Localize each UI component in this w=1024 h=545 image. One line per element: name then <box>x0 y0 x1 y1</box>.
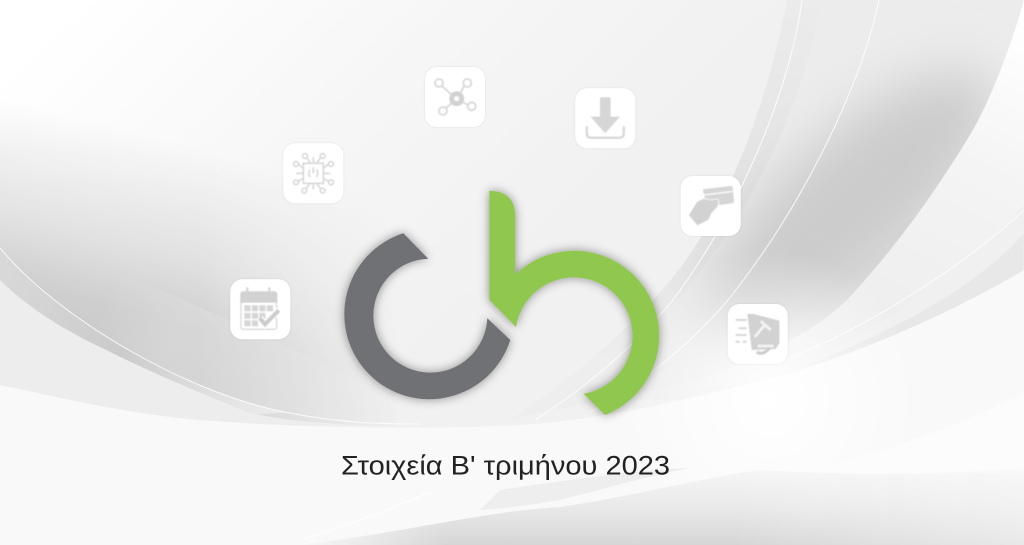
icon: chip card <box>283 143 343 203</box>
icon: payment card <box>681 176 741 236</box>
title: Στοιχεία Β' τριμήνου 2023 <box>341 450 670 480</box>
logo: green b <box>489 191 659 415</box>
icon: download card <box>575 88 635 148</box>
icon: network card <box>425 67 485 127</box>
logo: grey c <box>344 233 510 399</box>
icon: calendar card <box>230 279 290 339</box>
icon: auction monitor card <box>728 304 788 364</box>
logo <box>344 191 659 415</box>
